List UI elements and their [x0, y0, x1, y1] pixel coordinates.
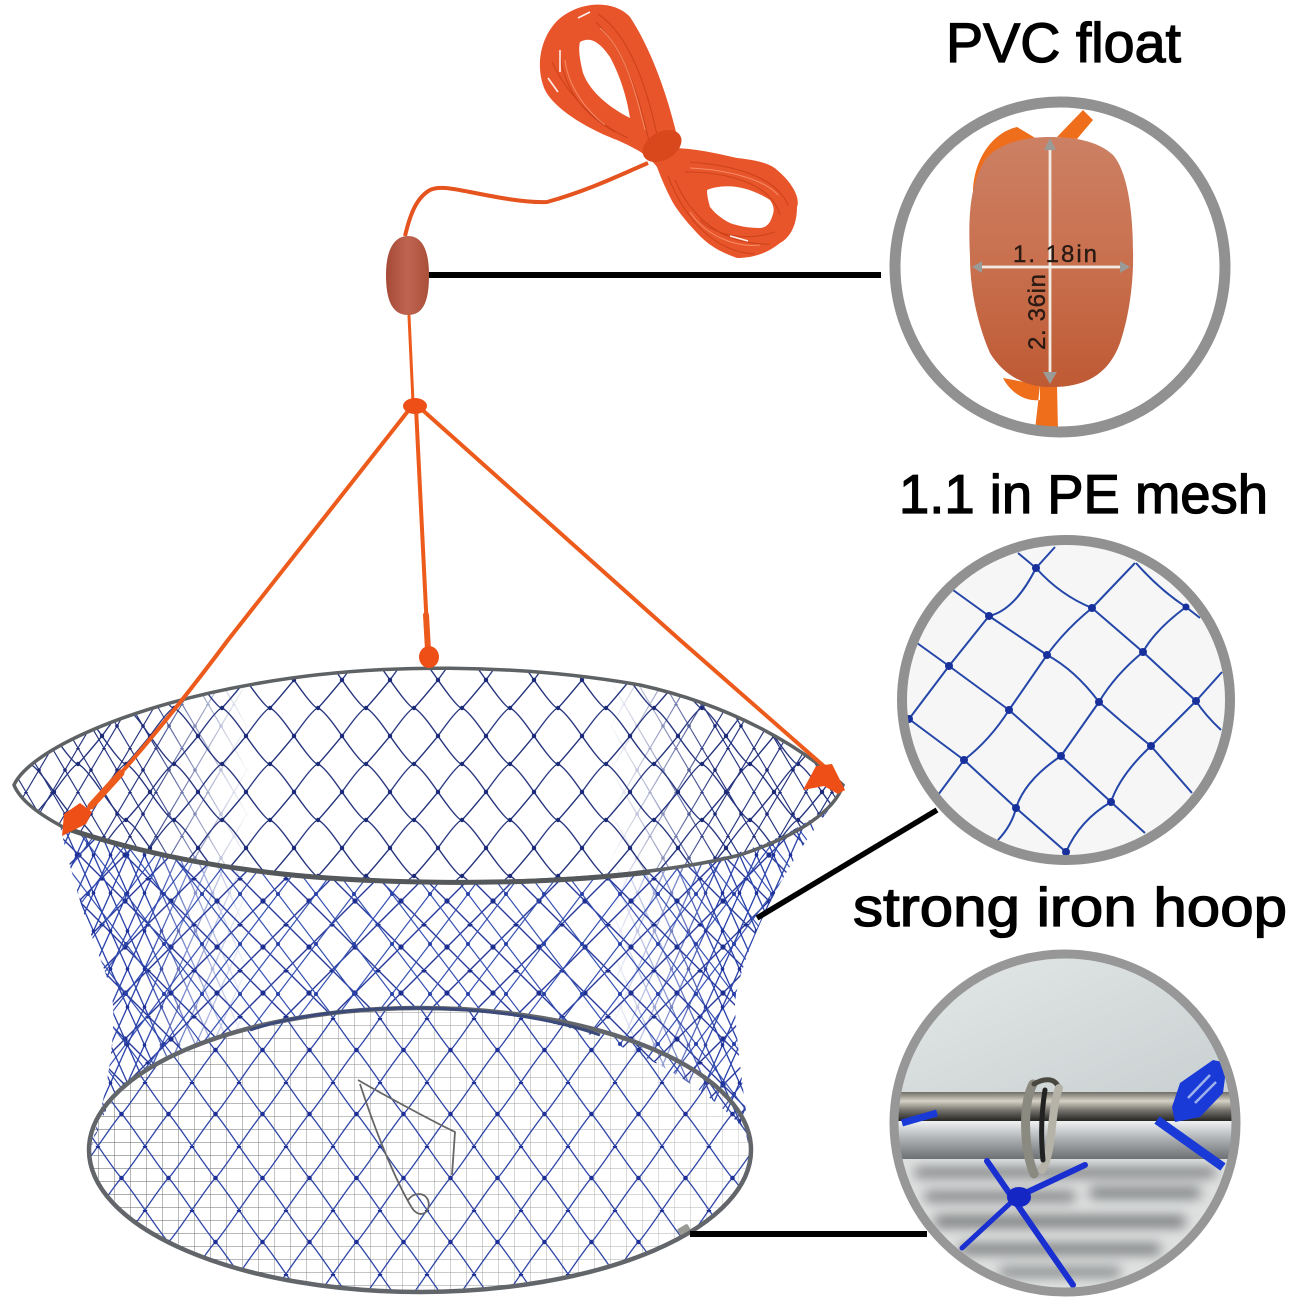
- mesh knots: [905, 564, 1200, 856]
- rope to float: [405, 163, 648, 236]
- orange bridle ropes: [76, 316, 826, 822]
- panel: PVC float detail: [895, 102, 1225, 432]
- heading: iron hoop: strong iron hoop: [853, 876, 1287, 938]
- ring: [894, 954, 1236, 1292]
- rope binding: [637, 123, 687, 169]
- top hoop: [14, 668, 843, 882]
- panel: iron hoop detail: [890, 950, 1240, 1299]
- net: hourglass body: [60, 810, 828, 1145]
- dimension arrows: [976, 146, 1128, 378]
- blue knot and threads: [962, 1161, 1085, 1285]
- mesh threads: [909, 547, 1222, 852]
- blue tuft on hoop: [902, 1060, 1227, 1167]
- split ring: [1026, 1080, 1059, 1174]
- arrow heads: [972, 138, 1130, 384]
- rope knots: [62, 398, 845, 836]
- net: inner back wall: [18, 670, 836, 880]
- wire hook: [358, 1080, 455, 1214]
- backdrop: [902, 958, 1228, 1092]
- heading: PE mesh: 1.1 in PE mesh: [899, 463, 1268, 525]
- upper loop: [540, 5, 680, 167]
- heading: PVC float: PVC float: [946, 11, 1181, 74]
- hoop clip: [677, 1224, 691, 1236]
- net: floor mesh and wire grid: [85, 1005, 755, 1295]
- blurred mesh floor: [902, 1159, 1228, 1288]
- lower loop: [657, 148, 798, 258]
- height label: 2. 36in: [1024, 274, 1051, 350]
- float body: [969, 137, 1133, 387]
- ring: [895, 102, 1225, 432]
- connector: mesh: [757, 810, 937, 918]
- connector: hoop: [690, 1231, 927, 1237]
- gaps in strands: [548, 12, 748, 241]
- panel: PE mesh detail: [902, 540, 1230, 860]
- knot: [1007, 1187, 1031, 1207]
- float rope ends: [973, 110, 1093, 430]
- upper rod: [890, 1092, 1240, 1122]
- width label: 1. 18in: [1013, 241, 1097, 268]
- rope strand texture: [552, 14, 788, 254]
- small float: [386, 236, 429, 315]
- crab net: [10, 316, 850, 1295]
- connector: float: [429, 272, 881, 278]
- lower rod: [890, 1121, 1240, 1159]
- ring: [902, 540, 1230, 860]
- bottom hoop: [89, 1008, 751, 1292]
- rope coil: [405, 5, 798, 258]
